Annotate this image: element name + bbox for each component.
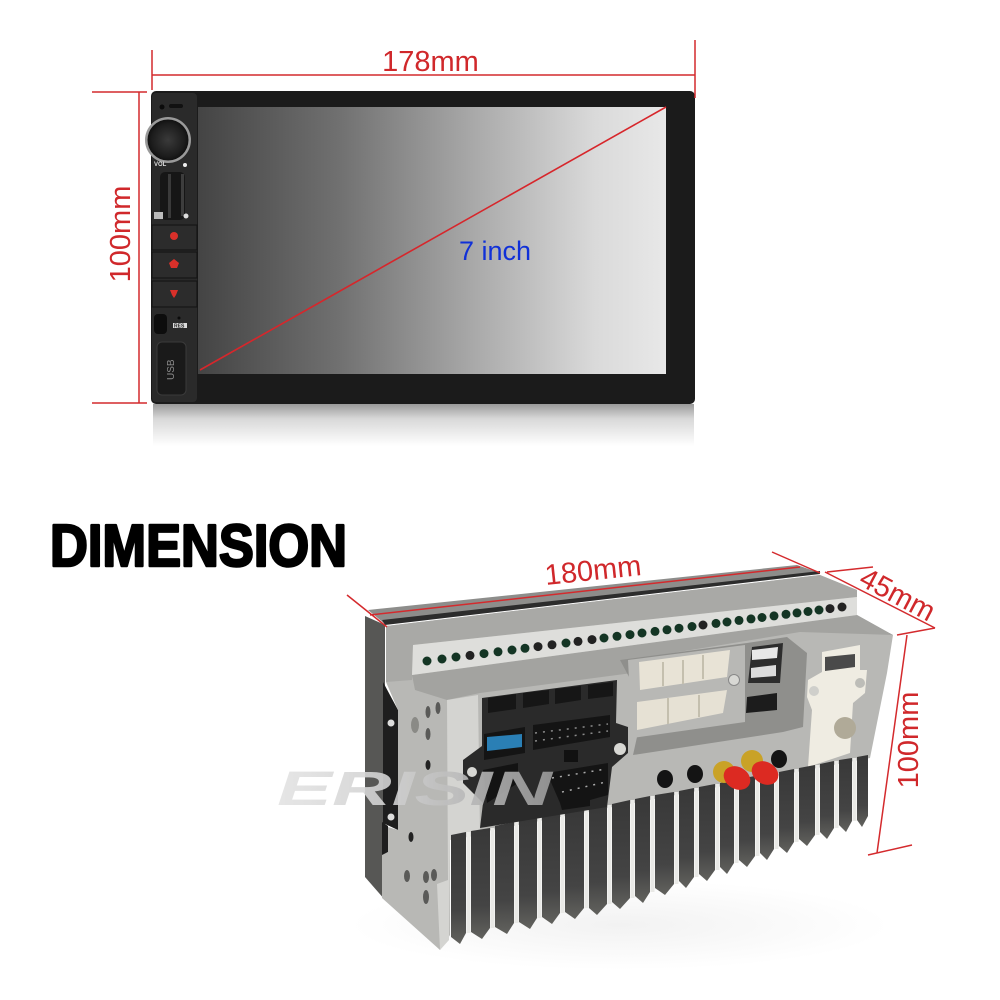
white connector bottom bbox=[637, 690, 727, 730]
fuse bbox=[484, 727, 525, 760]
panel: rear view of head unit bbox=[277, 565, 893, 970]
heading: dimension: DIMENSION bbox=[50, 513, 347, 579]
dimension: 178mm width: 178mm bbox=[382, 46, 479, 78]
dimension: 100mm rear height: 100mm bbox=[893, 692, 925, 788]
soft shadow bbox=[350, 880, 890, 970]
vent strip bbox=[412, 597, 857, 675]
screen bbox=[198, 107, 666, 374]
bracket holes bbox=[404, 702, 440, 904]
sd icon marks bbox=[154, 163, 188, 219]
button 1 bbox=[152, 225, 197, 250]
connector screws bbox=[467, 743, 626, 777]
black port bbox=[746, 693, 777, 713]
dimension: 180mm length: 180mm bbox=[543, 550, 643, 592]
silver body bbox=[382, 575, 893, 950]
center square bbox=[564, 750, 578, 762]
diagonal measure line bbox=[200, 107, 666, 370]
black connector block bbox=[463, 680, 628, 828]
7 inch label: 7 inch bbox=[459, 236, 531, 266]
outer frame bbox=[151, 91, 695, 404]
volume knob bbox=[145, 117, 191, 163]
pin rows bbox=[533, 715, 610, 750]
microphone dot bbox=[160, 104, 164, 110]
lower right port bbox=[547, 763, 608, 810]
watermark: ERISIN bbox=[277, 763, 554, 816]
shaded band under vent bbox=[412, 615, 893, 700]
ir slot bbox=[169, 104, 183, 108]
dimension: 180mm length bbox=[347, 550, 820, 627]
vent holes bbox=[422, 602, 846, 666]
aux jack bbox=[154, 314, 167, 334]
screw bbox=[728, 674, 740, 686]
black rail bbox=[382, 682, 398, 856]
light bracket face bbox=[437, 695, 480, 950]
white mounting plate bbox=[807, 645, 867, 767]
button 2 bbox=[152, 252, 197, 278]
usb ports bbox=[748, 643, 783, 683]
res button label bbox=[173, 316, 187, 330]
vol label: VOL bbox=[154, 162, 167, 168]
left control strip bbox=[145, 93, 197, 402]
connector plate bbox=[628, 645, 745, 738]
button 3 bbox=[152, 281, 197, 307]
top plate shade bbox=[386, 575, 857, 682]
lower left port bbox=[483, 763, 518, 803]
left dark side panel bbox=[365, 616, 385, 900]
white connector top bbox=[639, 650, 730, 690]
label holes bbox=[657, 750, 787, 788]
dimension: 100mm rear height bbox=[868, 628, 935, 855]
sd card slots bbox=[160, 172, 185, 220]
antenna connector 2 bbox=[741, 750, 783, 790]
antenna connector 1 bbox=[713, 761, 755, 795]
heat sink fins bbox=[451, 755, 868, 944]
dimension: 178mm width bbox=[152, 40, 695, 98]
dimension: 100mm height bbox=[92, 92, 147, 403]
heat sink fin edges bbox=[468, 758, 854, 933]
dimension: 100mm height: 100mm bbox=[105, 186, 137, 282]
reflection under unit bbox=[153, 404, 694, 446]
panel: front view of head unit bbox=[145, 91, 695, 446]
usb cover: USB bbox=[166, 359, 177, 380]
top slots bbox=[488, 682, 613, 713]
usb cover bbox=[157, 342, 186, 395]
lid with dark strip bbox=[368, 565, 820, 625]
res button label: RES bbox=[174, 324, 185, 330]
dimension: 45mm depth: 45mm bbox=[854, 562, 940, 628]
recess bbox=[620, 637, 807, 755]
